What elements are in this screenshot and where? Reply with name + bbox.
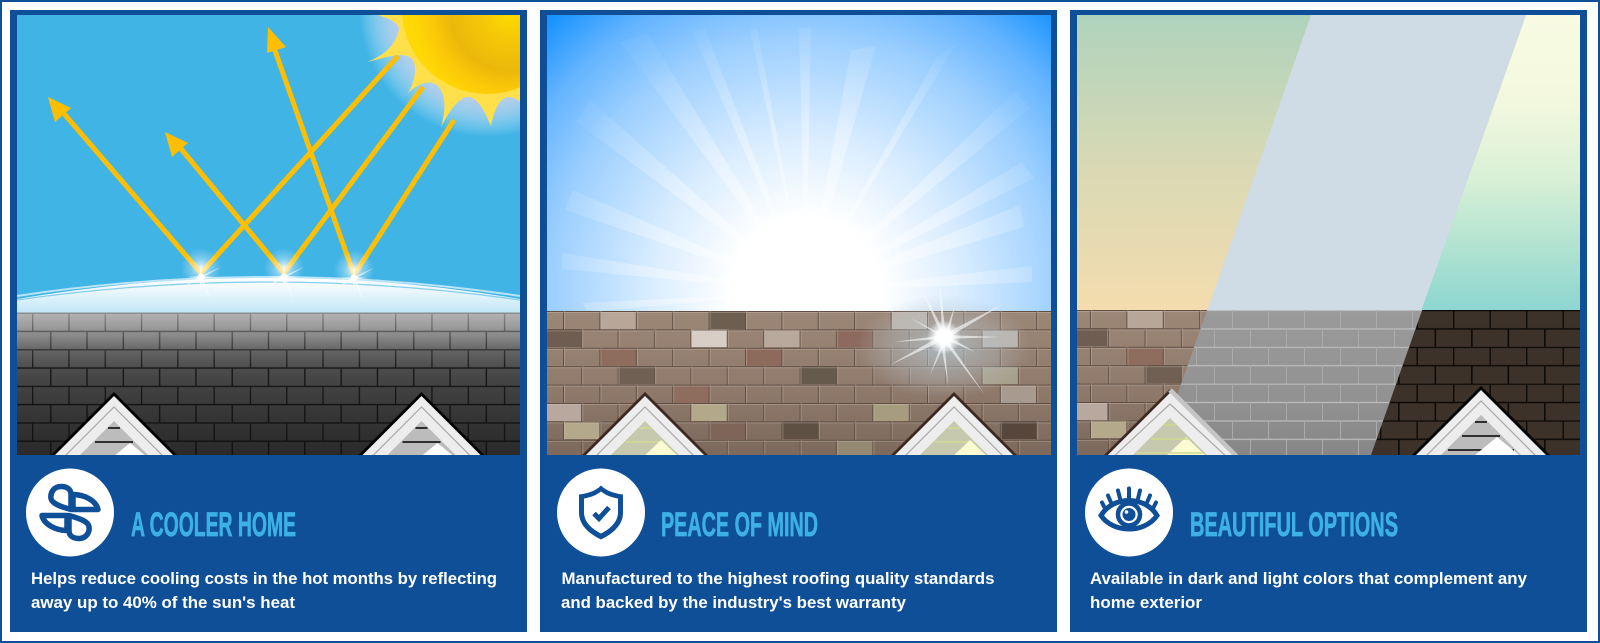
dark shingles: [1370, 310, 1580, 456]
body text: away up to 40% of the sun's heat: [30, 592, 295, 612]
illustration: bright sky and roof glint: [546, 14, 1050, 466]
arrows: reflected heat: [48, 26, 354, 274]
left sky: [1077, 15, 1526, 310]
icon: shield with check: [556, 468, 644, 556]
grey shingles: [1178, 310, 1422, 455]
panel: peace of mind: [540, 10, 1057, 632]
body text: Manufactured to the highest roofing quality standards: [561, 568, 994, 588]
body text: [560, 568, 994, 612]
roof glint: [862, 288, 1026, 394]
body text: [1090, 568, 1527, 612]
heading: A COOLER HOME: [130, 506, 296, 544]
sky: [546, 14, 1050, 314]
heading: PEACE OF MIND: [660, 506, 818, 544]
sunburst rays: [562, 28, 1034, 312]
glints on the roof: [180, 248, 374, 302]
right sky: [1420, 14, 1580, 310]
illustration: sun reflecting off roof: [17, 15, 520, 455]
icon: eye: [1084, 468, 1172, 556]
body text: home exterior: [1090, 592, 1202, 612]
body text: and backed by the industry's best warranty: [560, 592, 906, 612]
left dormer: [1104, 389, 1170, 455]
heading: BEAUTIFUL OPTIONS: [1190, 506, 1398, 544]
left dormer edge over grey strip: [1104, 390, 1240, 460]
body text: Available in dark and light colors that complement any: [1090, 568, 1527, 588]
body text: [30, 568, 496, 612]
panel: a cooler home: [10, 10, 527, 632]
dormers: [51, 392, 484, 455]
reflective roof coating dome: [17, 276, 520, 312]
tan shingles: [1077, 310, 1207, 455]
top edge bump: [1526, 8, 1582, 10]
arrows: incoming sun rays: [200, 56, 454, 274]
dark shingle roof: [16, 312, 520, 455]
icon: fan: [26, 468, 114, 556]
tan shingle roof: [546, 310, 1050, 458]
body text: Helps reduce cooling costs in the hot months by reflecting: [30, 568, 496, 588]
icon: sun: [361, 15, 520, 135]
dormers: [582, 392, 1017, 455]
illustration: three colour options: [1076, 14, 1580, 464]
middle sky: [1206, 14, 1526, 310]
panel: beautiful options: [1070, 10, 1587, 632]
right dormer: [1410, 386, 1550, 460]
